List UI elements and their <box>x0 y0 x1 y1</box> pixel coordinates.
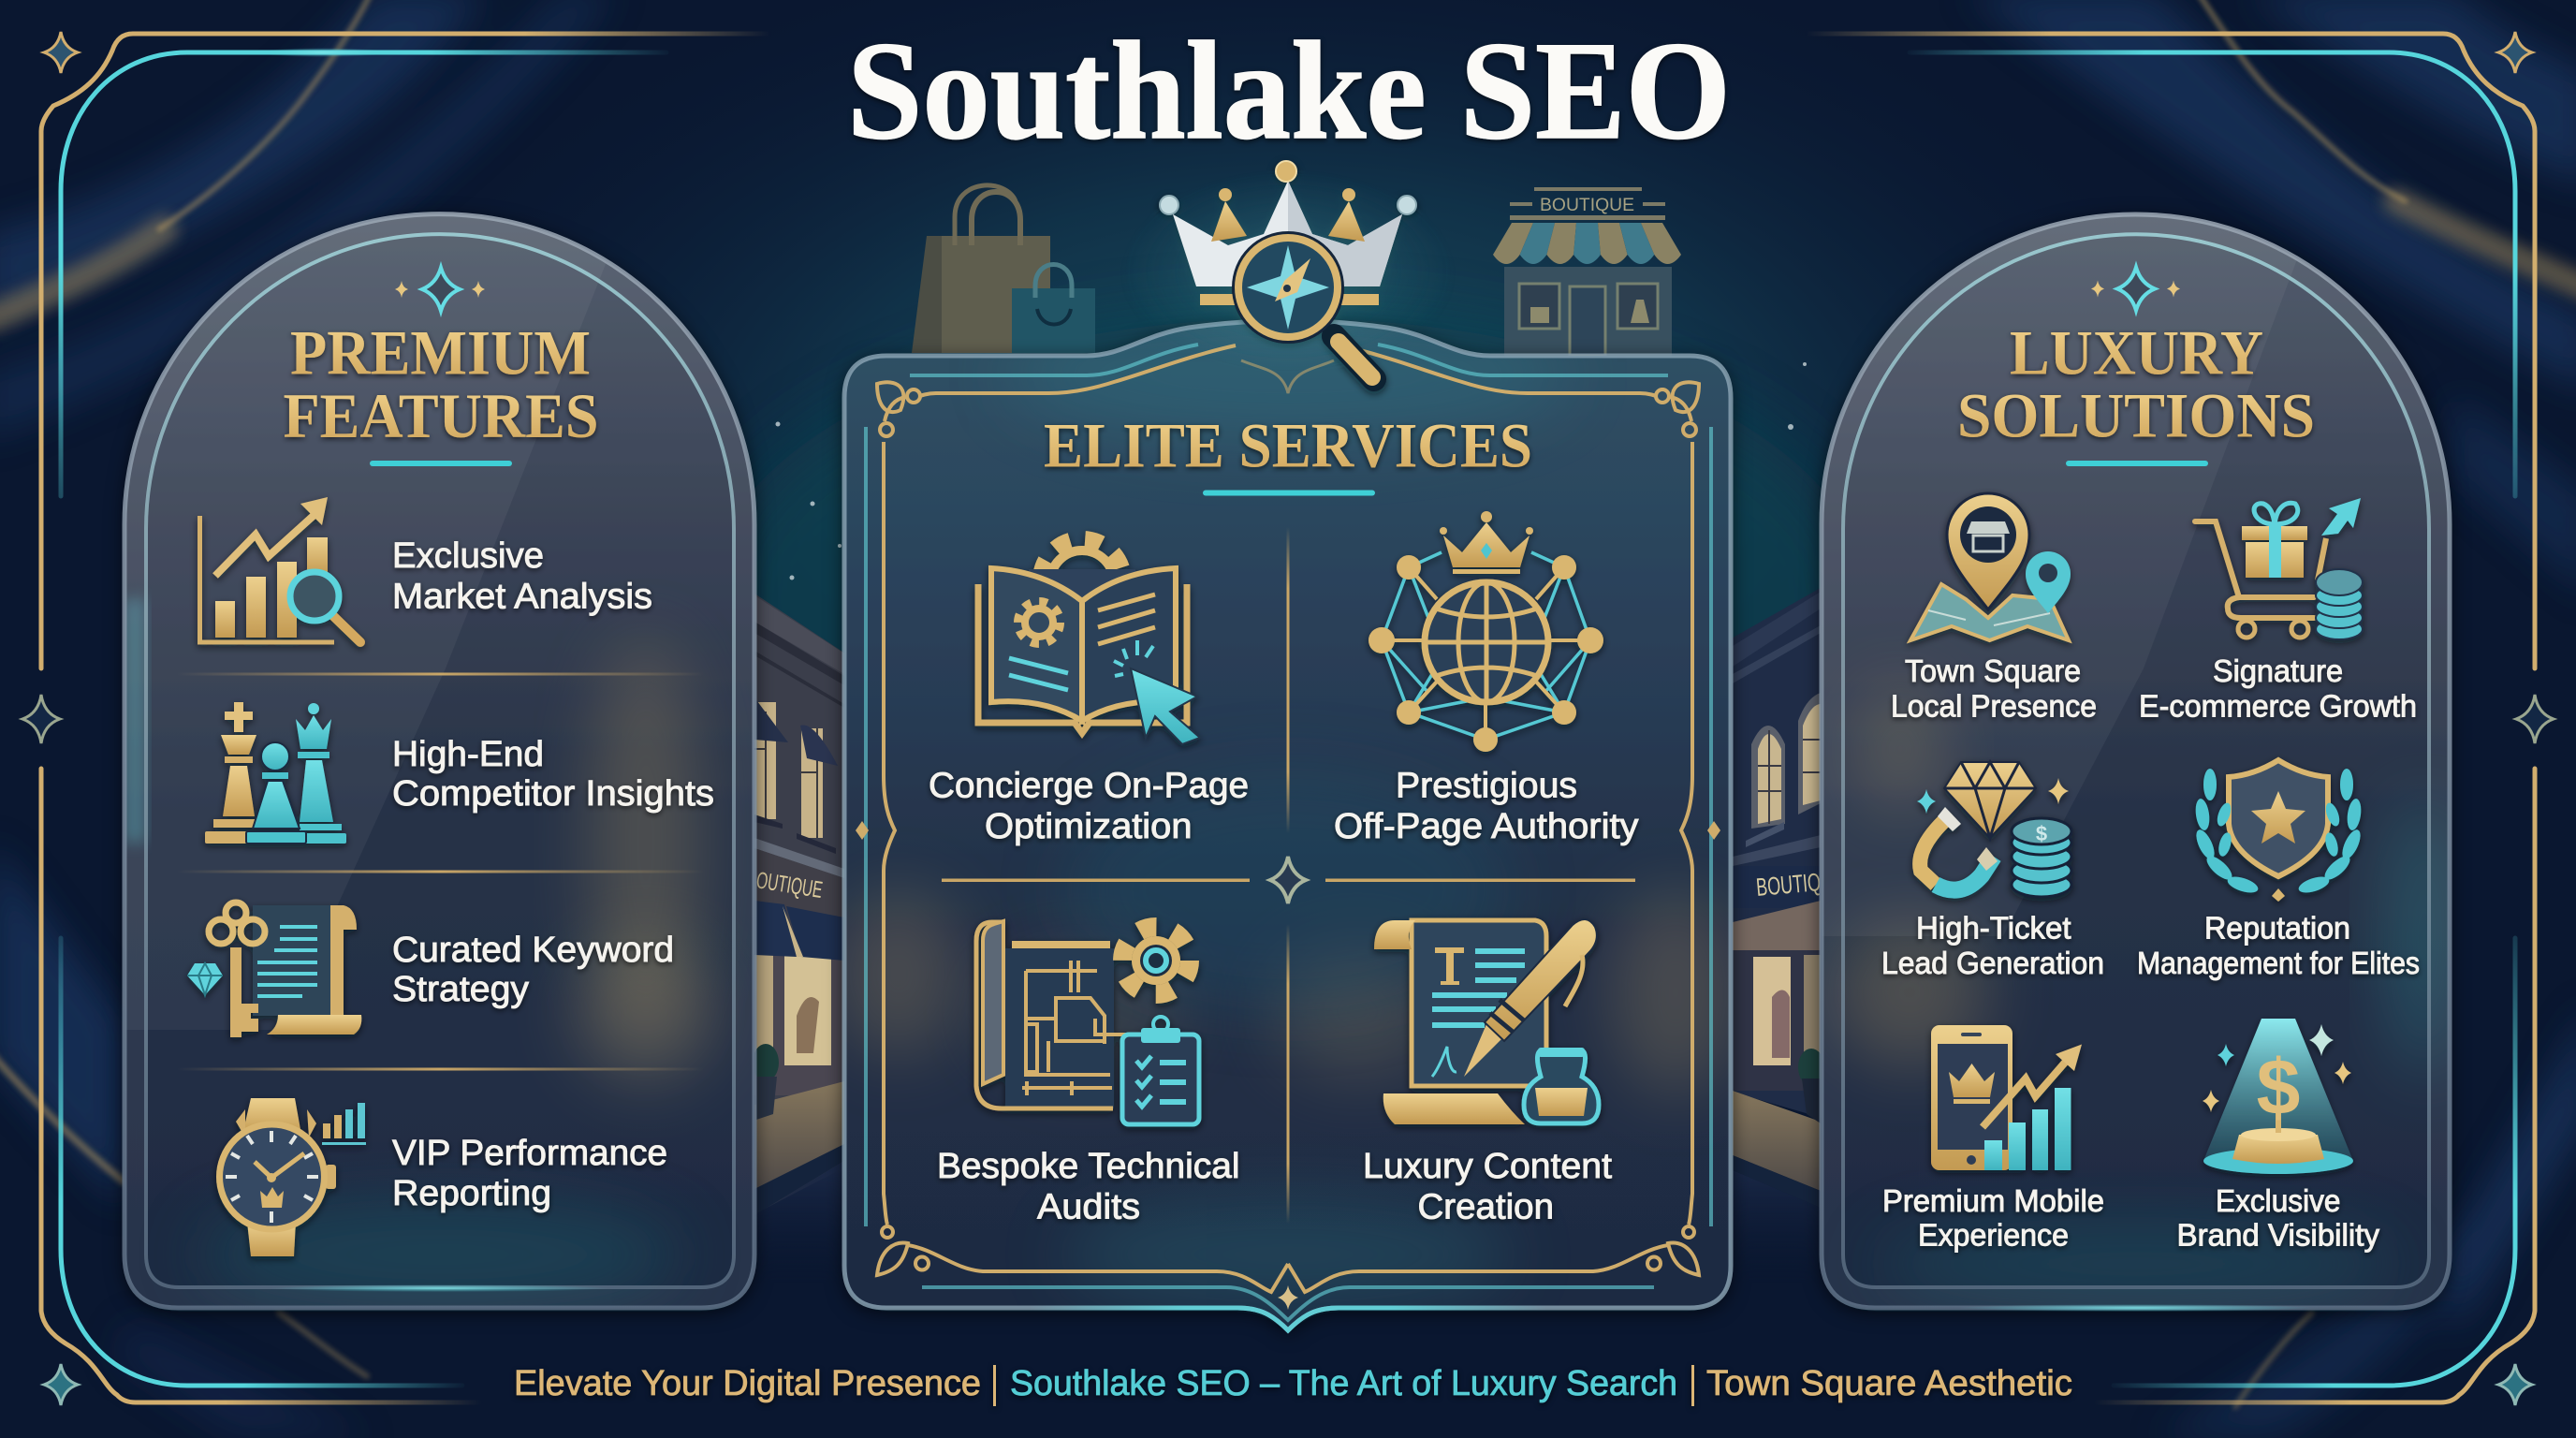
text: exclusive brand visibility: Brand Visibility <box>2177 1218 2379 1253</box>
icon: diamond magnet lead generation: $ <box>2036 822 2047 845</box>
text: vip performance reporting: Reporting <box>392 1174 551 1213</box>
heading: luxury solutions <box>1957 316 2315 451</box>
text: high-end competitor insights: High-End <box>392 735 544 774</box>
panel: elite services <box>833 309 1741 1330</box>
storefront sign text: BOUTIQUE <box>1540 196 1634 215</box>
text: concierge on-page optimization: Optimization <box>985 807 1193 846</box>
icon: luxury watch <box>219 1098 366 1256</box>
text: curated keyword strategy <box>392 931 674 1009</box>
text: high-end competitor insights <box>392 735 714 814</box>
gold ornamental frame left half <box>856 345 1288 1292</box>
text: prestigious off-page authority <box>1334 766 1638 846</box>
icon: open book with gear and cursor <box>978 534 1200 744</box>
footer tagline: Elevate Your Digital Presence <box>514 1364 981 1403</box>
text: town square local presence: Town Square <box>1905 653 2081 688</box>
icon: spotlight brand visibility <box>2203 1019 2353 1174</box>
panel: luxury solutions <box>1822 214 2462 1312</box>
text: high-ticket lead generation <box>1881 911 2104 980</box>
text: vip performance reporting: VIP Performance <box>392 1134 667 1173</box>
heading: luxury solutions: LUXURY <box>2010 316 2263 388</box>
icon: boutique storefront behind panel <box>1493 187 1681 356</box>
text: bespoke technical audits: Audits <box>1037 1188 1140 1227</box>
gold ornamental frame right half <box>1288 345 1720 1292</box>
text: premium mobile experience: Experience <box>1918 1218 2069 1253</box>
text: concierge on-page optimization: Concierge On-Page <box>929 766 1249 805</box>
text: exclusive market analysis: Exclusive <box>392 536 544 576</box>
text: signature e-commerce growth: Signature <box>2213 653 2343 688</box>
icon: market analysis chart <box>200 497 360 642</box>
text: prestigious off-page authority: Off-Page Authority <box>1334 807 1638 846</box>
text: curated keyword strategy: Strategy <box>392 970 529 1009</box>
icon: shopping bags behind panel <box>912 185 1095 353</box>
frame left side <box>22 32 771 1405</box>
text: high-ticket lead generation: Lead Generation <box>1881 946 2104 980</box>
icon: premium mobile growth <box>1931 1025 2082 1170</box>
heading: elite services: ELITE SERVICES <box>1044 410 1532 481</box>
title: Southlake SEO <box>847 13 1731 169</box>
text: exclusive market analysis: Market Analysis <box>392 577 652 616</box>
text: exclusive brand visibility: Exclusive <box>2216 1183 2340 1218</box>
text: exclusive market analysis <box>392 536 652 616</box>
boutique sign text left: OUTIQUE <box>754 867 825 903</box>
text: reputation management for elites: Management for Elites <box>2137 946 2420 980</box>
background building: right boutique street <box>1728 585 1825 1311</box>
text: premium mobile experience <box>1882 1183 2104 1253</box>
glass arch panel right <box>1822 214 2450 1308</box>
footer tagline: Town Square Aesthetic <box>1706 1364 2072 1403</box>
icon: diamond magnet lead generation <box>1917 762 2071 897</box>
icon: key and scroll with diamond <box>187 902 361 1037</box>
sparkle ornament right <box>2091 268 2180 311</box>
text: signature e-commerce growth: E-commerce Growth <box>2139 689 2417 724</box>
icon: globe network with crown <box>1368 511 1603 752</box>
text: prestigious off-page authority: Prestigious <box>1396 766 1577 805</box>
text: high-ticket lead generation: High-Ticket <box>1916 911 2071 946</box>
text: signature e-commerce growth <box>2139 653 2417 724</box>
text: reputation management for elites <box>2137 911 2420 980</box>
text: curated keyword strategy: Curated Keyword <box>392 931 674 970</box>
icon: blueprint gear and checklist <box>976 921 1199 1124</box>
footer tagline <box>514 1364 2072 1406</box>
text: high-end competitor insights: Competitor Insights <box>392 774 714 814</box>
text: luxury content creation: Creation <box>1417 1188 1554 1227</box>
background building: left boutique street <box>749 590 848 1311</box>
text: exclusive brand visibility <box>2177 1183 2379 1253</box>
heading: premium features: FEATURES <box>283 380 599 451</box>
icon: shield with laurels <box>2192 760 2364 902</box>
icon: crown with compass magnifier <box>1120 161 1456 379</box>
footer tagline: Southlake SEO – The Art of Luxury Search <box>1010 1364 1677 1403</box>
text: luxury content creation: Luxury Content <box>1363 1147 1612 1186</box>
text: concierge on-page optimization <box>929 766 1249 846</box>
icon: spotlight brand visibility: $ <box>2257 1043 2300 1131</box>
frame right side <box>1805 32 2554 1405</box>
heading: premium features <box>283 316 599 451</box>
inner teal line <box>866 345 1711 1320</box>
text: town square local presence <box>1891 653 2097 724</box>
text: reputation management for elites: Reputation <box>2204 911 2350 946</box>
sparkle ornament <box>395 268 485 311</box>
text: premium mobile experience: Premium Mobile <box>1882 1183 2104 1218</box>
panel: premium features <box>124 214 754 1311</box>
text: vip performance reporting <box>392 1134 667 1213</box>
icon: chess pieces <box>205 702 346 844</box>
text: town square local presence: Local Presence <box>1891 689 2097 724</box>
heading: premium features: PREMIUM <box>290 316 591 388</box>
text: bespoke technical audits: Bespoke Technical <box>937 1147 1239 1186</box>
boutique sign text right: BOUTIQ <box>1755 868 1822 902</box>
icon: e-commerce cart and gift <box>2195 498 2363 639</box>
glass panel centre <box>844 320 1731 1330</box>
icon: map pin local presence <box>1910 493 2071 640</box>
icon: scroll, fountain pen and ink <box>1374 919 1599 1124</box>
text: bespoke technical audits <box>937 1147 1239 1227</box>
glass arch panel left <box>124 214 754 1308</box>
heading: luxury solutions: SOLUTIONS <box>1957 380 2315 451</box>
text: luxury content creation <box>1363 1147 1612 1227</box>
